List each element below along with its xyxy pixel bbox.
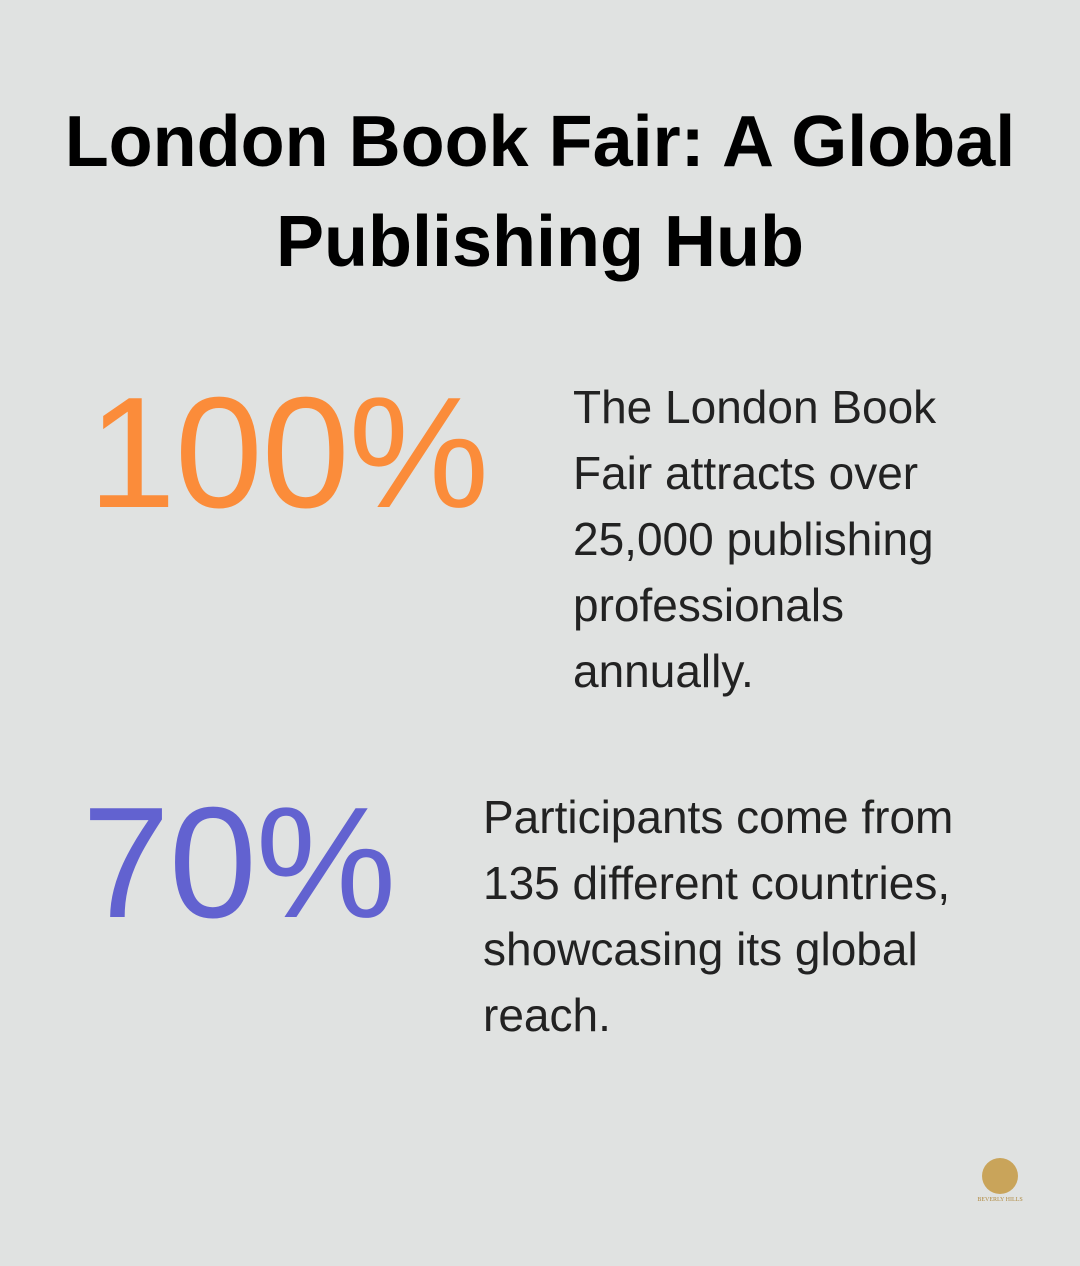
text: attendance: annually. [573,645,754,697]
title [65,102,1015,282]
stat: 70%: 70% [82,775,395,951]
logo: BEVERLY HILLS [977,1197,1023,1203]
text: countries: reach. [483,989,611,1041]
text: countries [483,791,953,1041]
text: countries: Participants come from [483,791,953,843]
text: attendance: The London Book [573,381,936,433]
title: London Book Fair: A Global [65,102,1015,182]
text: countries: 135 different countries, [483,857,950,909]
logo [977,1158,1023,1203]
text: attendance: Fair attracts over [573,447,918,499]
text: attendance [573,381,936,697]
text: attendance: professionals [573,579,844,631]
stat: 100%: 100% [88,365,488,541]
text: attendance: 25,000 publishing [573,513,934,565]
text: countries: showcasing its global [483,923,918,975]
title: Publishing Hub [276,202,804,282]
